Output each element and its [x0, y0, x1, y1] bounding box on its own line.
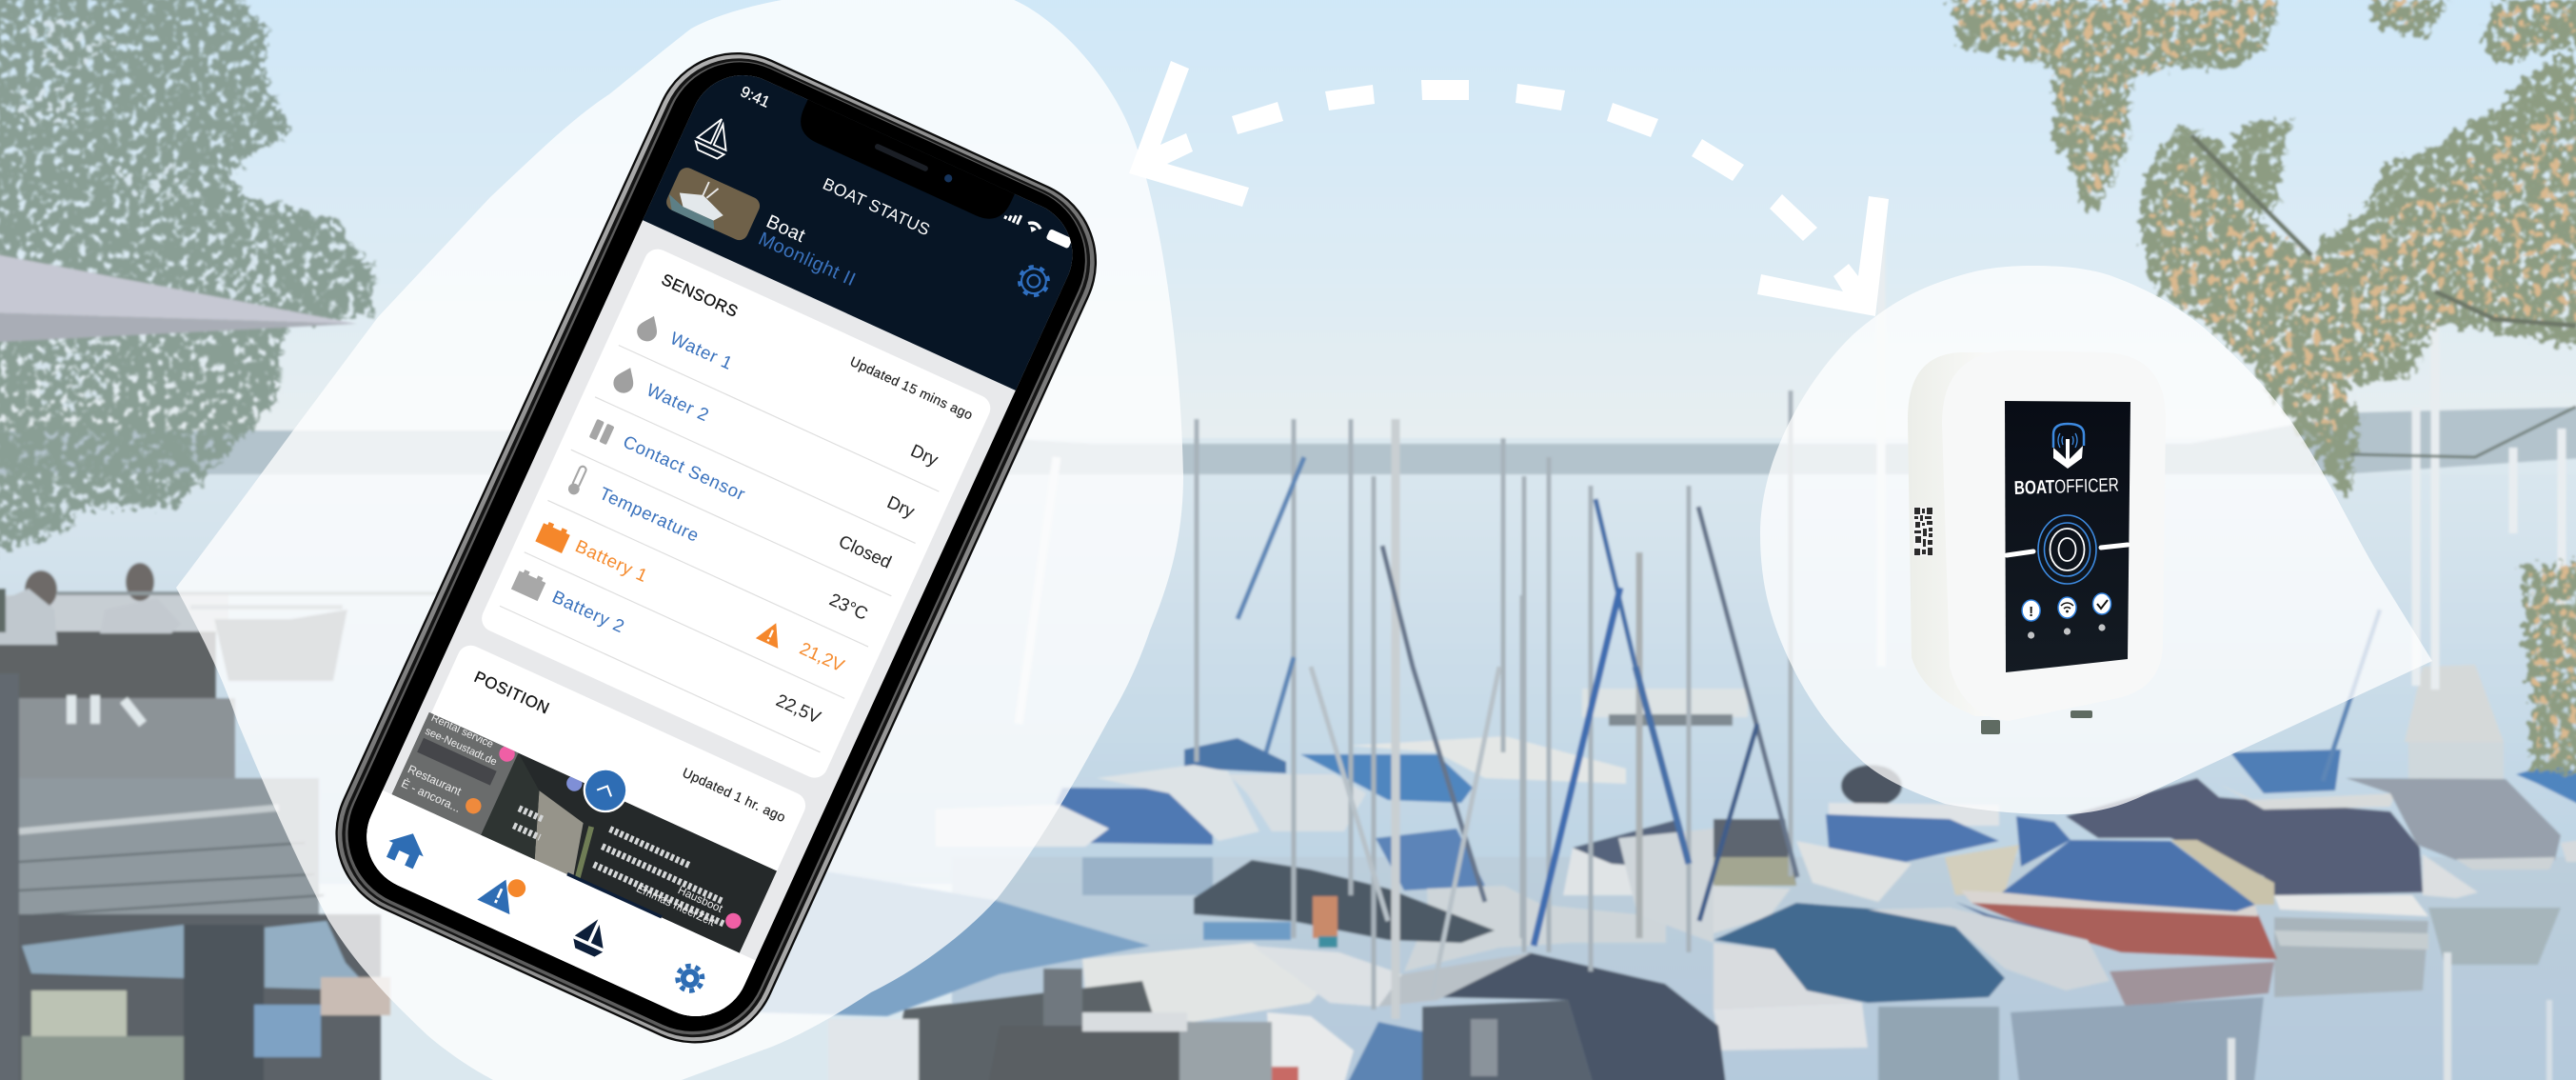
app header: Moonlight II	[755, 229, 859, 290]
row: battery 1 warning: 21,2V	[797, 638, 848, 676]
position heading: POSITION	[471, 668, 552, 718]
status bar time: 9:41	[738, 83, 772, 111]
status button: check	[2092, 593, 2111, 614]
row: contact sensor: Contact Sensor	[620, 431, 748, 505]
indicator LEDs	[2028, 624, 2106, 639]
phone mockup	[335, 52, 1097, 1044]
row: water 1: Water 1	[667, 328, 736, 373]
updated time: Updated 1 hr. ago	[681, 765, 788, 825]
white blob behind phone	[176, 0, 1183, 1080]
title: BOAT STATUS	[820, 174, 933, 239]
row: contact sensor	[589, 417, 895, 572]
status button: alert	[2022, 600, 2040, 621]
tab: home	[383, 826, 430, 870]
map expand button	[576, 761, 635, 820]
logo: shield and anchor	[2053, 424, 2084, 469]
sensors card	[478, 245, 995, 782]
distant hills	[0, 407, 2576, 478]
arrowhead: towards device	[1757, 196, 1889, 316]
row: battery 2: 22,5V	[773, 690, 824, 728]
satellite map: Emmas meerZeit	[634, 882, 717, 929]
tab: boat	[570, 913, 614, 959]
umbrella	[0, 251, 357, 343]
sky	[0, 0, 2576, 438]
phone screen	[367, 75, 1072, 1016]
row: battery 2: Battery 2	[549, 587, 628, 637]
device front	[1942, 350, 2166, 721]
tab: settings	[674, 962, 706, 994]
light bars	[2007, 545, 2128, 555]
left deck, table and building	[0, 563, 533, 1080]
satellite map: see-Neustadt.de	[424, 726, 499, 769]
satellite map: Hausboot	[676, 884, 725, 915]
settings gear	[1018, 265, 1050, 297]
BoatOfficer device	[1908, 350, 2166, 734]
row: battery 1 warning: Battery 1	[572, 535, 651, 586]
lower water	[952, 857, 2576, 1080]
arrow dashes	[1232, 80, 1817, 241]
row: water 1: Dry	[908, 440, 941, 470]
row: water 1	[634, 311, 943, 472]
moored boats: upper row	[936, 665, 2576, 971]
row: water 2: Water 2	[644, 379, 712, 426]
row: temperature: 23°C	[826, 590, 871, 624]
device side	[1908, 352, 2028, 716]
row dividers	[500, 346, 939, 752]
app header	[643, 75, 1072, 390]
row: temperature	[566, 465, 874, 627]
boat name: Boat	[763, 211, 808, 247]
notch	[801, 99, 1015, 219]
satellite map: Restaurant	[406, 762, 464, 798]
sailboat logo	[694, 118, 727, 160]
ring control	[2038, 515, 2096, 584]
QR code sticker	[1913, 507, 1933, 556]
white blob behind device	[1760, 266, 2432, 814]
position card	[351, 640, 810, 1043]
phone frame	[308, 25, 1124, 1070]
left tree	[0, 0, 374, 558]
satellite map: È - ancora...	[399, 775, 463, 815]
brand name: BOATOFFICER	[2013, 475, 2119, 499]
connectors	[1981, 710, 2092, 734]
boat photo	[666, 168, 760, 240]
warning triangle	[756, 618, 787, 649]
black face panel	[2005, 401, 2130, 672]
updated time: Updated 15 mins ago	[848, 353, 976, 423]
water reflections	[1082, 857, 2561, 1080]
masts and rigging	[1019, 197, 2562, 1019]
far pier	[1582, 689, 1748, 726]
status icons	[1003, 215, 1071, 248]
blue roof and wooden hut	[666, 862, 1272, 1080]
status button: wifi	[2058, 597, 2076, 618]
moored boats: front row	[1267, 902, 2110, 1080]
row: battery 2	[511, 568, 825, 729]
seated people	[0, 563, 181, 645]
tab bar	[349, 789, 757, 1033]
arrowhead: towards phone	[1129, 61, 1249, 207]
row: contact sensor: Closed	[836, 530, 895, 572]
row: temperature: Temperature	[597, 483, 703, 546]
right tree	[1947, 0, 2576, 771]
tab: alerts	[477, 867, 528, 916]
row: battery 1 warning	[535, 518, 848, 679]
satellite map: Rental service	[429, 712, 495, 750]
row: water 2	[610, 364, 920, 525]
sensors heading: SENSORS	[659, 270, 741, 321]
dashed double arrow between phone and device	[1129, 61, 1889, 316]
moored boats: central row	[1082, 778, 2576, 1022]
status button: alert: !	[2029, 604, 2033, 620]
satellite map	[391, 710, 779, 953]
lake water	[0, 474, 2576, 884]
row: water 2: Dry	[884, 491, 919, 522]
